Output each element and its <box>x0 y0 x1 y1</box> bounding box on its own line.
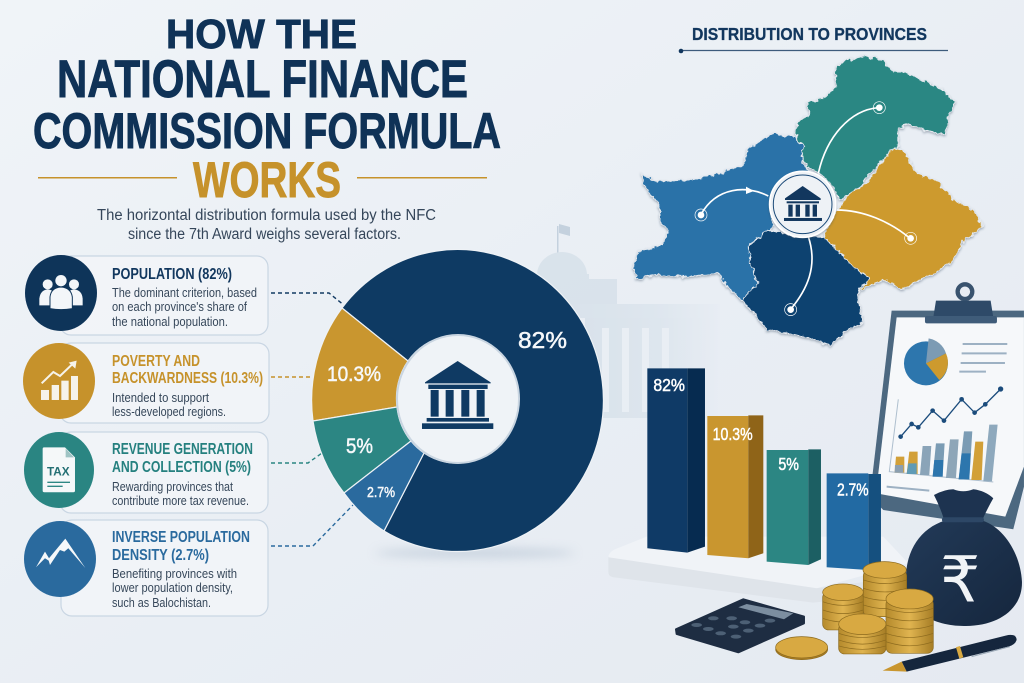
bar: 5% <box>767 449 821 565</box>
bar: 2.7% <box>827 473 881 570</box>
icon: growth chart <box>23 343 95 419</box>
subtitle <box>97 207 436 243</box>
clipboard <box>870 284 1024 529</box>
panel: density <box>24 520 268 616</box>
subtitle: The horizontal distribution formula used by the NFC <box>97 207 436 224</box>
route nodes <box>698 104 914 313</box>
bar: 5%: 5% <box>778 454 799 474</box>
panel: revenue: Rewarding provinces that <box>112 480 233 494</box>
bar: 82% <box>647 368 705 553</box>
title: NATIONAL FINANCE <box>57 50 468 109</box>
panel: revenue: contribute more tax revenue. <box>112 494 249 508</box>
province: teal <box>795 56 955 200</box>
panel: population: on each province's share of <box>112 300 247 314</box>
donut shadow <box>375 548 575 558</box>
bar: 10.3%: 10.3% <box>713 424 753 444</box>
calculator <box>676 599 804 652</box>
title: HOW THE <box>166 11 357 57</box>
panel: density: Benefiting provinces with <box>112 567 237 581</box>
background building <box>535 224 720 418</box>
panel: revenue: REVENUE GENERATION <box>112 441 253 458</box>
donut centre icon <box>397 335 519 463</box>
panel: population <box>25 255 268 335</box>
panel: density: lower population density, <box>112 581 233 595</box>
money bag: ₹ <box>940 546 980 616</box>
bar chart <box>647 368 881 570</box>
panel: population: the national population. <box>112 315 228 329</box>
panel: poverty: less-developed regions. <box>112 405 226 419</box>
panel: poverty <box>23 343 269 423</box>
subtitle: since the 7th Award weighs several factors. <box>128 226 401 243</box>
panel: density: DENSITY (2.7%) <box>112 547 209 564</box>
bar: 2.7%: 2.7% <box>837 480 869 500</box>
money bag <box>906 489 1022 626</box>
icon: population <box>25 255 97 331</box>
panel: population: The dominant criterion, based <box>112 286 257 300</box>
icon: tax document: TAX <box>47 465 70 479</box>
pen <box>883 635 1017 672</box>
province: blue <box>633 133 810 300</box>
route lines <box>701 108 910 309</box>
map of provinces <box>633 56 983 345</box>
donut chart: 10.3% <box>327 363 381 386</box>
donut chart: 82% <box>518 327 567 353</box>
panel: revenue: AND COLLECTION (5%) <box>112 459 251 476</box>
donut chart <box>312 249 603 551</box>
heading: distribution to provinces <box>679 24 948 53</box>
panel: poverty: Intended to support <box>112 391 209 405</box>
title: WORKS <box>193 152 341 208</box>
map hub icon <box>770 171 836 237</box>
panel: density: such as Balochistan. <box>112 596 211 610</box>
panel: poverty: BACKWARDNESS (10.3%) <box>112 370 263 387</box>
panel: poverty: POVERTY AND <box>112 353 200 370</box>
bar: 82%: 82% <box>653 375 685 395</box>
province: gold <box>823 148 983 293</box>
icon: tax document <box>24 432 94 508</box>
heading: distribution to provinces: DISTRIBUTION TO PROVINCES <box>692 24 927 44</box>
platform <box>608 537 908 603</box>
donut chart: 5% <box>346 435 373 458</box>
province: navy <box>742 230 870 345</box>
connectors <box>271 293 353 546</box>
icon: mountains <box>24 521 96 597</box>
coins <box>776 562 933 660</box>
panel: density: INVERSE POPULATION <box>112 529 250 546</box>
clipboard line chart <box>898 386 1003 439</box>
clipboard pie <box>904 338 948 385</box>
title: COMMISSION FORMULA <box>33 103 501 159</box>
panel: revenue <box>24 432 268 513</box>
title <box>33 11 501 208</box>
panel: population: POPULATION (82%) <box>112 266 232 283</box>
bar: 10.3% <box>707 415 763 558</box>
donut chart: 2.7% <box>367 484 395 501</box>
clipboard bars <box>889 399 998 482</box>
